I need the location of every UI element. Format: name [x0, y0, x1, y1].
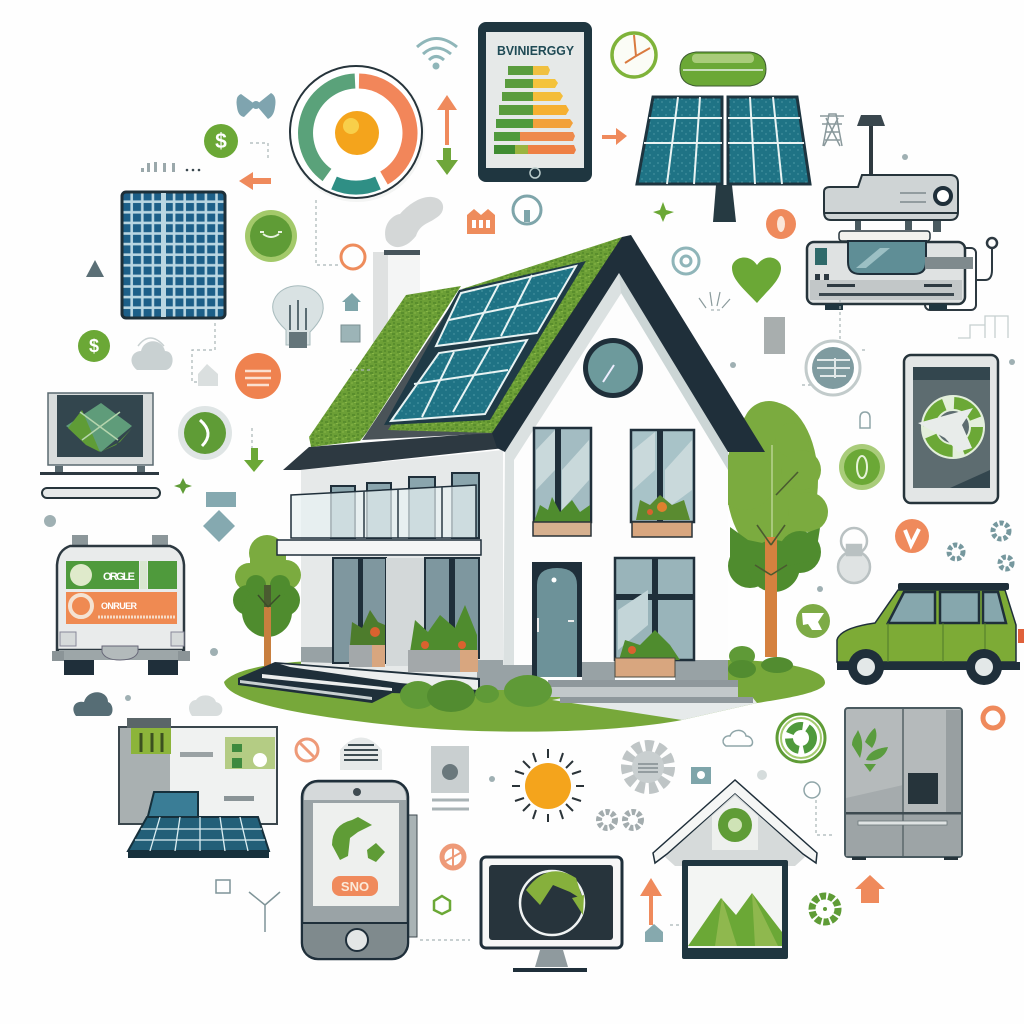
icon: grey phone [764, 317, 785, 354]
house: glass balcony rail [291, 485, 476, 538]
icons: orange and green small gears [434, 846, 464, 914]
phone pill label: SNO [341, 879, 369, 894]
small chart outline [958, 316, 1008, 338]
tablet: recycling [904, 355, 998, 503]
icon: wifi [417, 38, 457, 68]
solar panel: left [122, 192, 225, 318]
house: clock [583, 338, 643, 398]
arrow: left orange [239, 172, 271, 190]
house: ground floor planters [349, 605, 478, 672]
icon: camera [691, 767, 711, 784]
icon: dollar coin top: $ [215, 130, 227, 153]
icon: dollar coin left [78, 330, 110, 362]
icon: green gear [812, 896, 838, 922]
icon: faded house [198, 364, 218, 386]
chimney with smoke [373, 197, 443, 342]
dashboard with solar laptop [119, 718, 277, 858]
icon: orange prohibited [296, 739, 318, 761]
icon: small cloud [723, 730, 753, 746]
arrows: up and down [436, 95, 458, 175]
arrow: green down [244, 448, 264, 472]
front steps: right [548, 680, 753, 703]
house: front door [532, 562, 582, 677]
arrow: orange right [602, 128, 627, 145]
monitor with map [40, 393, 160, 498]
house: ground floor glazing [333, 558, 479, 666]
icon: small dots [44, 154, 1015, 782]
rating bars [494, 66, 576, 154]
phone with recycling [302, 781, 417, 959]
icon: small outline house [645, 924, 663, 942]
house: green roof [309, 286, 461, 447]
desktop monitor [481, 857, 622, 972]
icon: grey triangle [86, 260, 104, 277]
mini bars [141, 162, 200, 172]
icon: meter circle [806, 341, 860, 395]
arrow: orange up [640, 878, 662, 925]
house: gable wall [503, 273, 728, 690]
icon: green star [653, 202, 674, 222]
icon: teal gauge [513, 196, 541, 224]
icons: clouds below van [73, 692, 222, 716]
house: roof eave [283, 432, 505, 470]
dotted connectors [192, 143, 868, 940]
house: upper windows [534, 428, 694, 522]
fridge [845, 708, 962, 860]
icon: green puzzle coin [796, 604, 830, 638]
icons: teal box and diamond [203, 492, 236, 542]
icon: dollar coin top [204, 124, 238, 158]
icons: teal gears [949, 523, 1012, 569]
icon: factory [467, 209, 495, 234]
icon: orange ring right [983, 708, 1003, 728]
icon: silver lock ring [838, 528, 870, 583]
rating heading: BVINIERGGY [497, 43, 574, 58]
icon: green smiley [245, 210, 297, 262]
energy unit machine [807, 231, 997, 310]
icon: orange menu coin [235, 353, 281, 399]
icon: orange circle [766, 209, 796, 239]
icon: recycle coin [777, 714, 825, 762]
icon: bow [236, 93, 276, 119]
tablet: energy rating [478, 22, 592, 182]
tree: right [715, 401, 828, 657]
icons: small house and chart [341, 293, 361, 342]
lawn [224, 660, 825, 732]
icon: orange ring [341, 245, 365, 269]
icon: square and turbine [216, 880, 280, 932]
house: side wall [301, 450, 503, 690]
house: roof gable band [492, 235, 765, 452]
icon: sun rays [699, 292, 730, 308]
icon: vent [340, 738, 382, 770]
front steps: left [238, 662, 480, 703]
house [277, 235, 765, 690]
house: lower window [615, 558, 694, 677]
icon: small lock [860, 412, 870, 428]
icon: energy dial [289, 66, 425, 202]
icon: large gear [627, 746, 669, 788]
icons: small gears [599, 812, 641, 828]
icon: green clock [612, 33, 656, 77]
icon: teal ring [673, 248, 699, 274]
icon: green round button [178, 406, 232, 460]
van [52, 535, 190, 675]
laptop solar panel [128, 792, 269, 858]
icon: wall meter [431, 746, 469, 809]
icon: orange check coin [895, 519, 929, 553]
house: stone base [301, 647, 728, 690]
house: balcony slab [277, 540, 481, 555]
projector machine [824, 115, 958, 232]
solar panel on pole [637, 97, 810, 222]
icon: cloud left [131, 338, 173, 370]
icon: light bulb [273, 286, 323, 348]
van label orange: ONRUER [101, 601, 138, 611]
tree: left [233, 535, 301, 671]
icon: green capsule [680, 52, 766, 86]
house: upper balcony windows [331, 473, 479, 538]
icon: dollar coin left: $ [89, 336, 99, 356]
bushes [400, 646, 793, 712]
icon: pylon [820, 114, 844, 146]
house: window planters [533, 495, 692, 537]
icon: small star [174, 478, 192, 494]
van label green: ORGLE [103, 571, 135, 583]
house: solar panel on roof [384, 261, 586, 425]
icon: sun [512, 749, 584, 822]
house: green roof right [388, 237, 622, 433]
icon: small ring [757, 770, 820, 798]
car [837, 583, 1024, 685]
gable house with landscape [653, 780, 817, 959]
arrow: orange house up [855, 875, 885, 903]
phone pill label [332, 876, 378, 896]
icon: green heart [732, 258, 781, 303]
icon: green coin right [839, 444, 885, 490]
